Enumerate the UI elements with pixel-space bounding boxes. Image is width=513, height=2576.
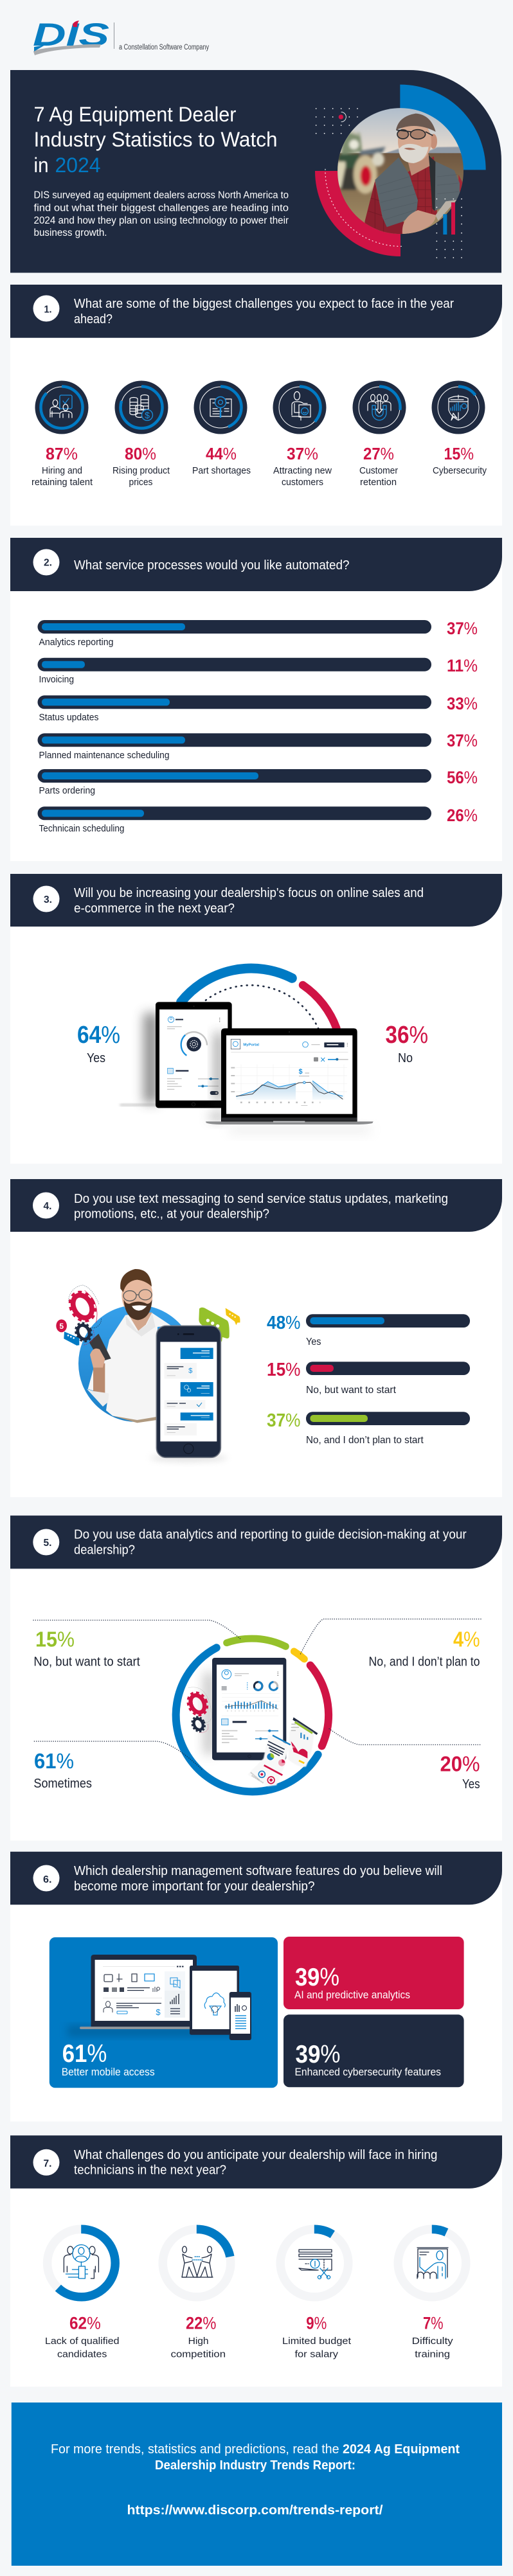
stat: yes 64%	[77, 1022, 120, 1065]
stat: no 36%	[386, 1022, 428, 1065]
panel: question 6 software features	[10, 1852, 502, 2122]
heading: question 4: Do you use text messaging to send service status updates, marketing	[74, 1192, 448, 1206]
stat: difficulty training 7%: training	[415, 2349, 450, 2359]
icon: banknote with scissors	[299, 2250, 332, 2279]
intro text: 2024 and how they plan on using technology to power their	[33, 215, 289, 226]
text: call to action: https://www.discorp.com/trends-report/	[127, 2503, 383, 2518]
card: better mobile access 61%	[50, 1937, 278, 2088]
stat: no but want to start 15%: No, but want to start	[33, 1655, 140, 1669]
stat: cybersecurity 15%: 15%	[444, 444, 474, 463]
icon: trainer at a board	[417, 2248, 448, 2278]
stat: retention 27%: Customer	[359, 466, 398, 476]
bar: yes 48%: 48%	[267, 1313, 300, 1333]
hero illustration: farmer photo with arcs	[315, 85, 486, 258]
bar: yes 48%	[267, 1313, 470, 1347]
bar: status updates 33%: 33%	[447, 694, 478, 713]
stat: difficulty training 7%: 7%	[423, 2313, 444, 2332]
text: call to action: For more trends, statistics and predictions, read the 2024 Ag Equipment	[51, 2442, 460, 2456]
panel: question 5 analytics	[10, 1516, 502, 1841]
panel: question 2 automation	[10, 538, 502, 861]
stat: no 36%: 36%	[386, 1022, 428, 1049]
stat: hiring 87%	[32, 380, 93, 488]
logo: DIS: DIS	[33, 17, 109, 53]
stat: prices 80%: Rising product	[113, 466, 170, 476]
heading: question 4: 4.	[44, 1201, 51, 1212]
icon: coin stacks: $	[145, 410, 150, 420]
illustration: tablet and laptop	[120, 1002, 374, 1133]
chart: arcs yes and no	[181, 968, 336, 1035]
stat: new customers 37%: customers	[282, 477, 323, 488]
stat: limited budget 9%: 9%	[306, 2313, 327, 2332]
stat: high competition 22%: 22%	[186, 2313, 216, 2332]
stat: part shortages 44%: 44%	[206, 444, 237, 463]
card: better mobile access 61%: Better mobile access	[62, 2066, 155, 2078]
title	[33, 103, 278, 177]
heading: question 5: Do you use data analytics and reporting to guide decision-making at your	[74, 1528, 467, 1542]
heading: question 6: Which dealership management software features do you believe will	[74, 1864, 442, 1878]
illustration: tablet and laptop: MyPortal	[243, 1043, 259, 1047]
bar: invoicing 11%: Invoicing	[39, 675, 74, 685]
stat: new customers 37%: Attracting new	[273, 466, 332, 476]
leader lines	[33, 1619, 481, 1770]
bar: planned maintenance 37%: Planned maintenance scheduling	[39, 751, 170, 761]
stat: new customers 37%: 37%	[287, 444, 318, 463]
bar: technician scheduling 26%: Technicain scheduling	[39, 824, 125, 834]
card: enhanced cybersecurity 39%	[284, 2014, 464, 2087]
stat: yes 20%: Yes	[462, 1777, 480, 1791]
title: 7 Ag Equipment Dealer	[33, 103, 237, 126]
heading: question 4	[10, 1179, 502, 1232]
intro text: find out what their biggest challenges are heading into	[33, 203, 289, 213]
bar: analytics reporting 37%: 37%	[447, 619, 478, 638]
panel: question 7 hiring technicians	[10, 2135, 502, 2386]
stat: cybersecurity 15%	[432, 380, 487, 476]
stat: difficulty training 7%: Difficulty	[412, 2336, 454, 2347]
heading: question 6: become more important for your dealership?	[74, 1879, 315, 1894]
stat: high competition 22%: competition	[171, 2349, 226, 2359]
heading: question 4: promotions, etc., at your dealership?	[74, 1207, 269, 1221]
stat: sometimes 61%	[33, 1749, 92, 1791]
heading: question 1: What are some of the biggest challenges you expect to face in the year	[74, 297, 454, 311]
bar: no plan 37%: No, and I don’t plan to start	[306, 1435, 424, 1446]
bar: yes 48%: Yes	[306, 1337, 321, 1347]
stat: hiring 87%: 87%	[46, 444, 78, 463]
intro text	[33, 190, 289, 238]
card: enhanced cybersecurity 39%: Enhanced cybersecurity features	[294, 2066, 441, 2078]
bar: no but want to start 15%	[267, 1360, 470, 1396]
stat: part shortages 44%	[192, 380, 251, 476]
bar: no but want to start 15%: No, but want to start	[306, 1385, 397, 1396]
stat: limited budget 9%: Limited budget	[282, 2336, 351, 2347]
card: enhanced cybersecurity 39%: 39%	[296, 2041, 341, 2068]
heading: question 7: technicians in the next year?	[74, 2163, 226, 2178]
stat: no and do not plan to 4%: No, and I don’t plan to	[369, 1655, 480, 1669]
bar: status updates 33%: Status updates	[39, 713, 99, 723]
heading: question 6	[10, 1852, 502, 1905]
title: 2024	[55, 154, 100, 177]
stat: yes 64%: 64%	[77, 1022, 120, 1049]
illustration: man with phone	[56, 1269, 240, 1462]
stat: part shortages 44%: Part shortages	[192, 466, 251, 476]
heading: question 7: 7.	[44, 2158, 51, 2169]
stat: retention 27%: retention	[360, 477, 397, 488]
heading: question 3: e-commerce in the next year?	[74, 902, 235, 916]
text: call to action: Dealership Industry Trends Report:	[155, 2458, 356, 2473]
stat: no but want to start 15%	[33, 1627, 140, 1669]
bar: technician scheduling 26%: 26%	[447, 806, 478, 825]
panel: question 1 challenges	[10, 285, 502, 526]
icon: catalog with magnifier	[210, 397, 231, 418]
bar: parts ordering 56%: Parts ordering	[39, 786, 95, 796]
logo: DIS	[33, 17, 209, 55]
panel: call to action	[12, 2403, 502, 2566]
panel: question 3 e-commerce	[10, 874, 502, 1164]
stat: sometimes 61%: 61%	[34, 1749, 74, 1773]
heading: question 5	[10, 1516, 502, 1568]
stat: new customers 37%	[273, 380, 332, 488]
stat: prices 80%	[113, 380, 170, 488]
heading: question 5: 5.	[44, 1538, 51, 1549]
title: in	[33, 154, 49, 177]
stat: hiring 87%: Hiring and	[42, 466, 82, 476]
stat: yes 20%	[440, 1752, 480, 1791]
bar: technician scheduling 26%	[37, 806, 478, 834]
icon: two people in tug of war	[182, 2246, 213, 2277]
bar: invoicing 11%	[37, 656, 478, 685]
title: Industry Statistics to Watch	[33, 128, 278, 151]
intro text: DIS surveyed ag equipment dealers across North America to	[33, 190, 289, 200]
text: call to action	[51, 2442, 460, 2518]
stat: no and do not plan to 4%	[369, 1627, 480, 1669]
stat: yes 20%: 20%	[440, 1752, 480, 1776]
stat: no and do not plan to 4%: 4%	[453, 1627, 480, 1651]
panel: hero	[10, 70, 501, 272]
card: better mobile access 61%: 61%	[62, 2040, 107, 2068]
bar: invoicing 11%: 11%	[447, 656, 478, 675]
bar: analytics reporting 37%: Analytics reporting	[39, 637, 113, 648]
stat: retention 27%: 27%	[363, 444, 394, 463]
bar: parts ordering 56%: 56%	[447, 768, 478, 787]
bar: analytics reporting 37%	[37, 619, 478, 648]
bar: planned maintenance 37%	[37, 731, 478, 761]
bar: no but want to start 15%: 15%	[267, 1360, 300, 1380]
illustration: tablet and laptop: $	[299, 1068, 303, 1076]
icon: coin stacks	[130, 395, 153, 420]
stat: prices 80%: 80%	[125, 444, 156, 463]
logo: DIS: a Constellation Software Company	[119, 44, 209, 51]
stat: high competition 22%: High	[188, 2336, 209, 2347]
heading: question 3	[10, 874, 502, 927]
bar: no plan 37%	[267, 1410, 470, 1446]
stat: qualified candidates 62%: Lack of qualified	[45, 2336, 120, 2347]
stat: limited budget 9%: for salary	[294, 2349, 339, 2359]
illustration: laptop tablet phone: $	[156, 2007, 161, 2017]
stat: hiring 87%: retaining talent	[32, 477, 93, 488]
stat: cybersecurity 15%: Cybersecurity	[433, 466, 487, 476]
stat: limited budget 9%	[280, 2229, 351, 2359]
icon: shield with chart	[449, 395, 468, 420]
icon: candidates under magnifier	[64, 2245, 98, 2278]
heading: question 1: ahead?	[74, 312, 113, 326]
stat: no 36%: No	[398, 1051, 413, 1065]
stat: retention 27%	[352, 380, 406, 488]
heading: question 3: 3.	[44, 894, 52, 905]
stat: qualified candidates 62%: 62%	[69, 2313, 101, 2332]
heading: question 1	[10, 285, 502, 338]
stat: no but want to start 15%: 15%	[35, 1627, 75, 1651]
icon: people and magnet	[368, 395, 391, 420]
intro text: business growth.	[33, 227, 107, 238]
panel: question 4 text messaging	[10, 1179, 502, 1497]
stat: difficulty training 7%	[398, 2229, 466, 2359]
illustration: man with phone: 5	[59, 1322, 64, 1331]
card: AI and predictive analytics 39%	[284, 1937, 464, 2009]
stat: qualified candidates 62%	[45, 2229, 120, 2359]
stat: prices 80%: prices	[129, 477, 153, 488]
card: AI and predictive analytics 39%: 39%	[295, 1964, 339, 1991]
stat: sometimes 61%: Sometimes	[33, 1777, 92, 1791]
heading: question 1: 1.	[44, 305, 51, 315]
heading: question 2	[10, 538, 502, 591]
card: AI and predictive analytics 39%: AI and predictive analytics	[294, 1989, 410, 2001]
heading: question 2: What service processes would you like automated?	[74, 558, 350, 573]
bar: status updates 33%	[37, 694, 478, 723]
illustration: man with phone: $	[188, 1367, 193, 1374]
heading: question 7: What challenges do you anticipate your dealership will face in hiring	[74, 2148, 437, 2162]
icon: salesman with smiley board	[292, 392, 310, 420]
bar: parts ordering 56%	[37, 768, 478, 796]
icon: team and checklist	[50, 395, 72, 418]
bar: planned maintenance 37%: 37%	[447, 731, 478, 751]
heading: question 3: Will you be increasing your dealership's focus on online sales and	[74, 886, 424, 900]
illustration: laptop tablet phone	[68, 1955, 251, 2040]
illustration: ring with tablet and reports	[147, 1610, 357, 1820]
heading: question 6: 6.	[43, 1874, 51, 1885]
stat: qualified candidates 62%: candidates	[57, 2349, 107, 2359]
stat: yes 64%: Yes	[87, 1051, 105, 1065]
heading: question 7	[10, 2135, 502, 2189]
bar: no plan 37%: 37%	[267, 1410, 300, 1431]
heading: question 5: dealership?	[74, 1543, 135, 1557]
heading: question 2: 2.	[44, 558, 52, 568]
stat: high competition 22%	[163, 2229, 231, 2359]
